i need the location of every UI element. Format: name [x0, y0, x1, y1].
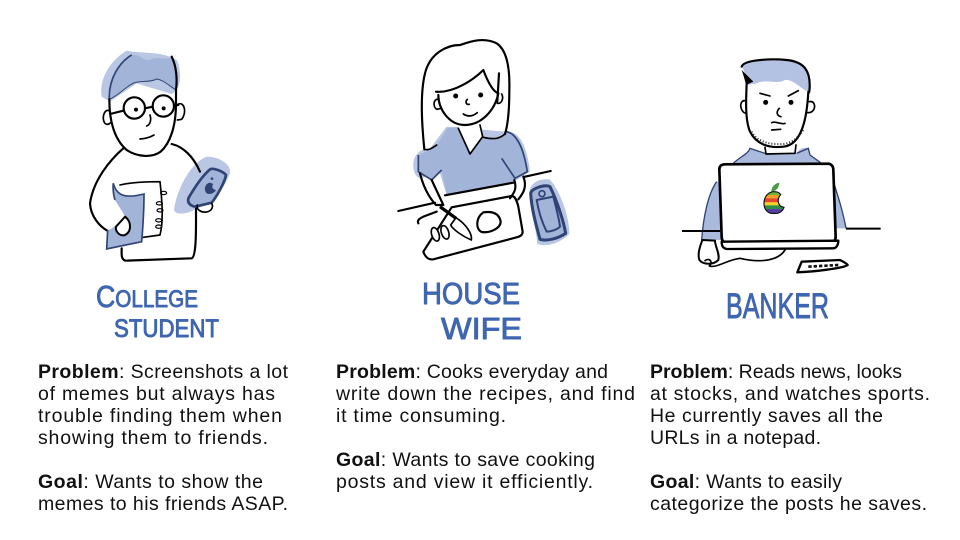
text: banker problem and goal: URLs in a notepad.	[650, 427, 821, 449]
text: banker problem and goal: Goal: Wants to easily	[650, 471, 842, 493]
text: college student problem and goal: trouble finding them when	[38, 405, 282, 427]
text: banker problem and goal: categorize the posts he saves.	[650, 493, 927, 515]
text: college student problem and goal: Goal: Wants to show the	[38, 471, 263, 493]
illustration: house wife	[398, 40, 569, 259]
label: banker: BANKER	[726, 287, 829, 326]
label: college student: COLLEGE	[96, 279, 198, 314]
text: college student problem and goal: showing them to friends.	[38, 427, 268, 449]
label: house wife	[422, 276, 522, 346]
label: college student: STUDENT	[114, 315, 219, 343]
panel: house wife	[335, 40, 635, 493]
panel: college student	[38, 51, 289, 515]
text: house wife problem and goal: posts and view it efficiently.	[336, 471, 593, 493]
text: banker problem and goal: Problem: Reads news, looks	[650, 361, 902, 383]
text: banker problem and goal: He currently saves all the	[650, 405, 883, 427]
text: house wife problem and goal: write down the recipes, and find	[335, 383, 635, 405]
text: college student problem and goal: Problem: Screenshots a lot	[38, 361, 289, 383]
panel: banker	[650, 59, 930, 515]
label: college student	[96, 279, 219, 343]
text: college student problem and goal: of memes but always has	[38, 383, 275, 405]
illustration: banker	[682, 59, 881, 272]
text: college student problem and goal: memes to his friends ASAP.	[38, 493, 288, 515]
text: house wife problem and goal: it time consuming.	[336, 405, 506, 427]
text: banker problem and goal	[650, 361, 930, 515]
text: college student problem and goal	[38, 361, 289, 515]
text: house wife problem and goal	[335, 361, 635, 493]
label: house wife: WIFE	[441, 311, 522, 346]
text: banker problem and goal: at stocks, and watches sports.	[650, 383, 930, 405]
illustration: college student	[90, 51, 230, 261]
text: house wife problem and goal: Goal: Wants to save cooking	[336, 449, 595, 471]
text: house wife problem and goal: Problem: Cooks everyday and	[336, 361, 608, 383]
label: house wife: HOUSE	[422, 276, 520, 311]
